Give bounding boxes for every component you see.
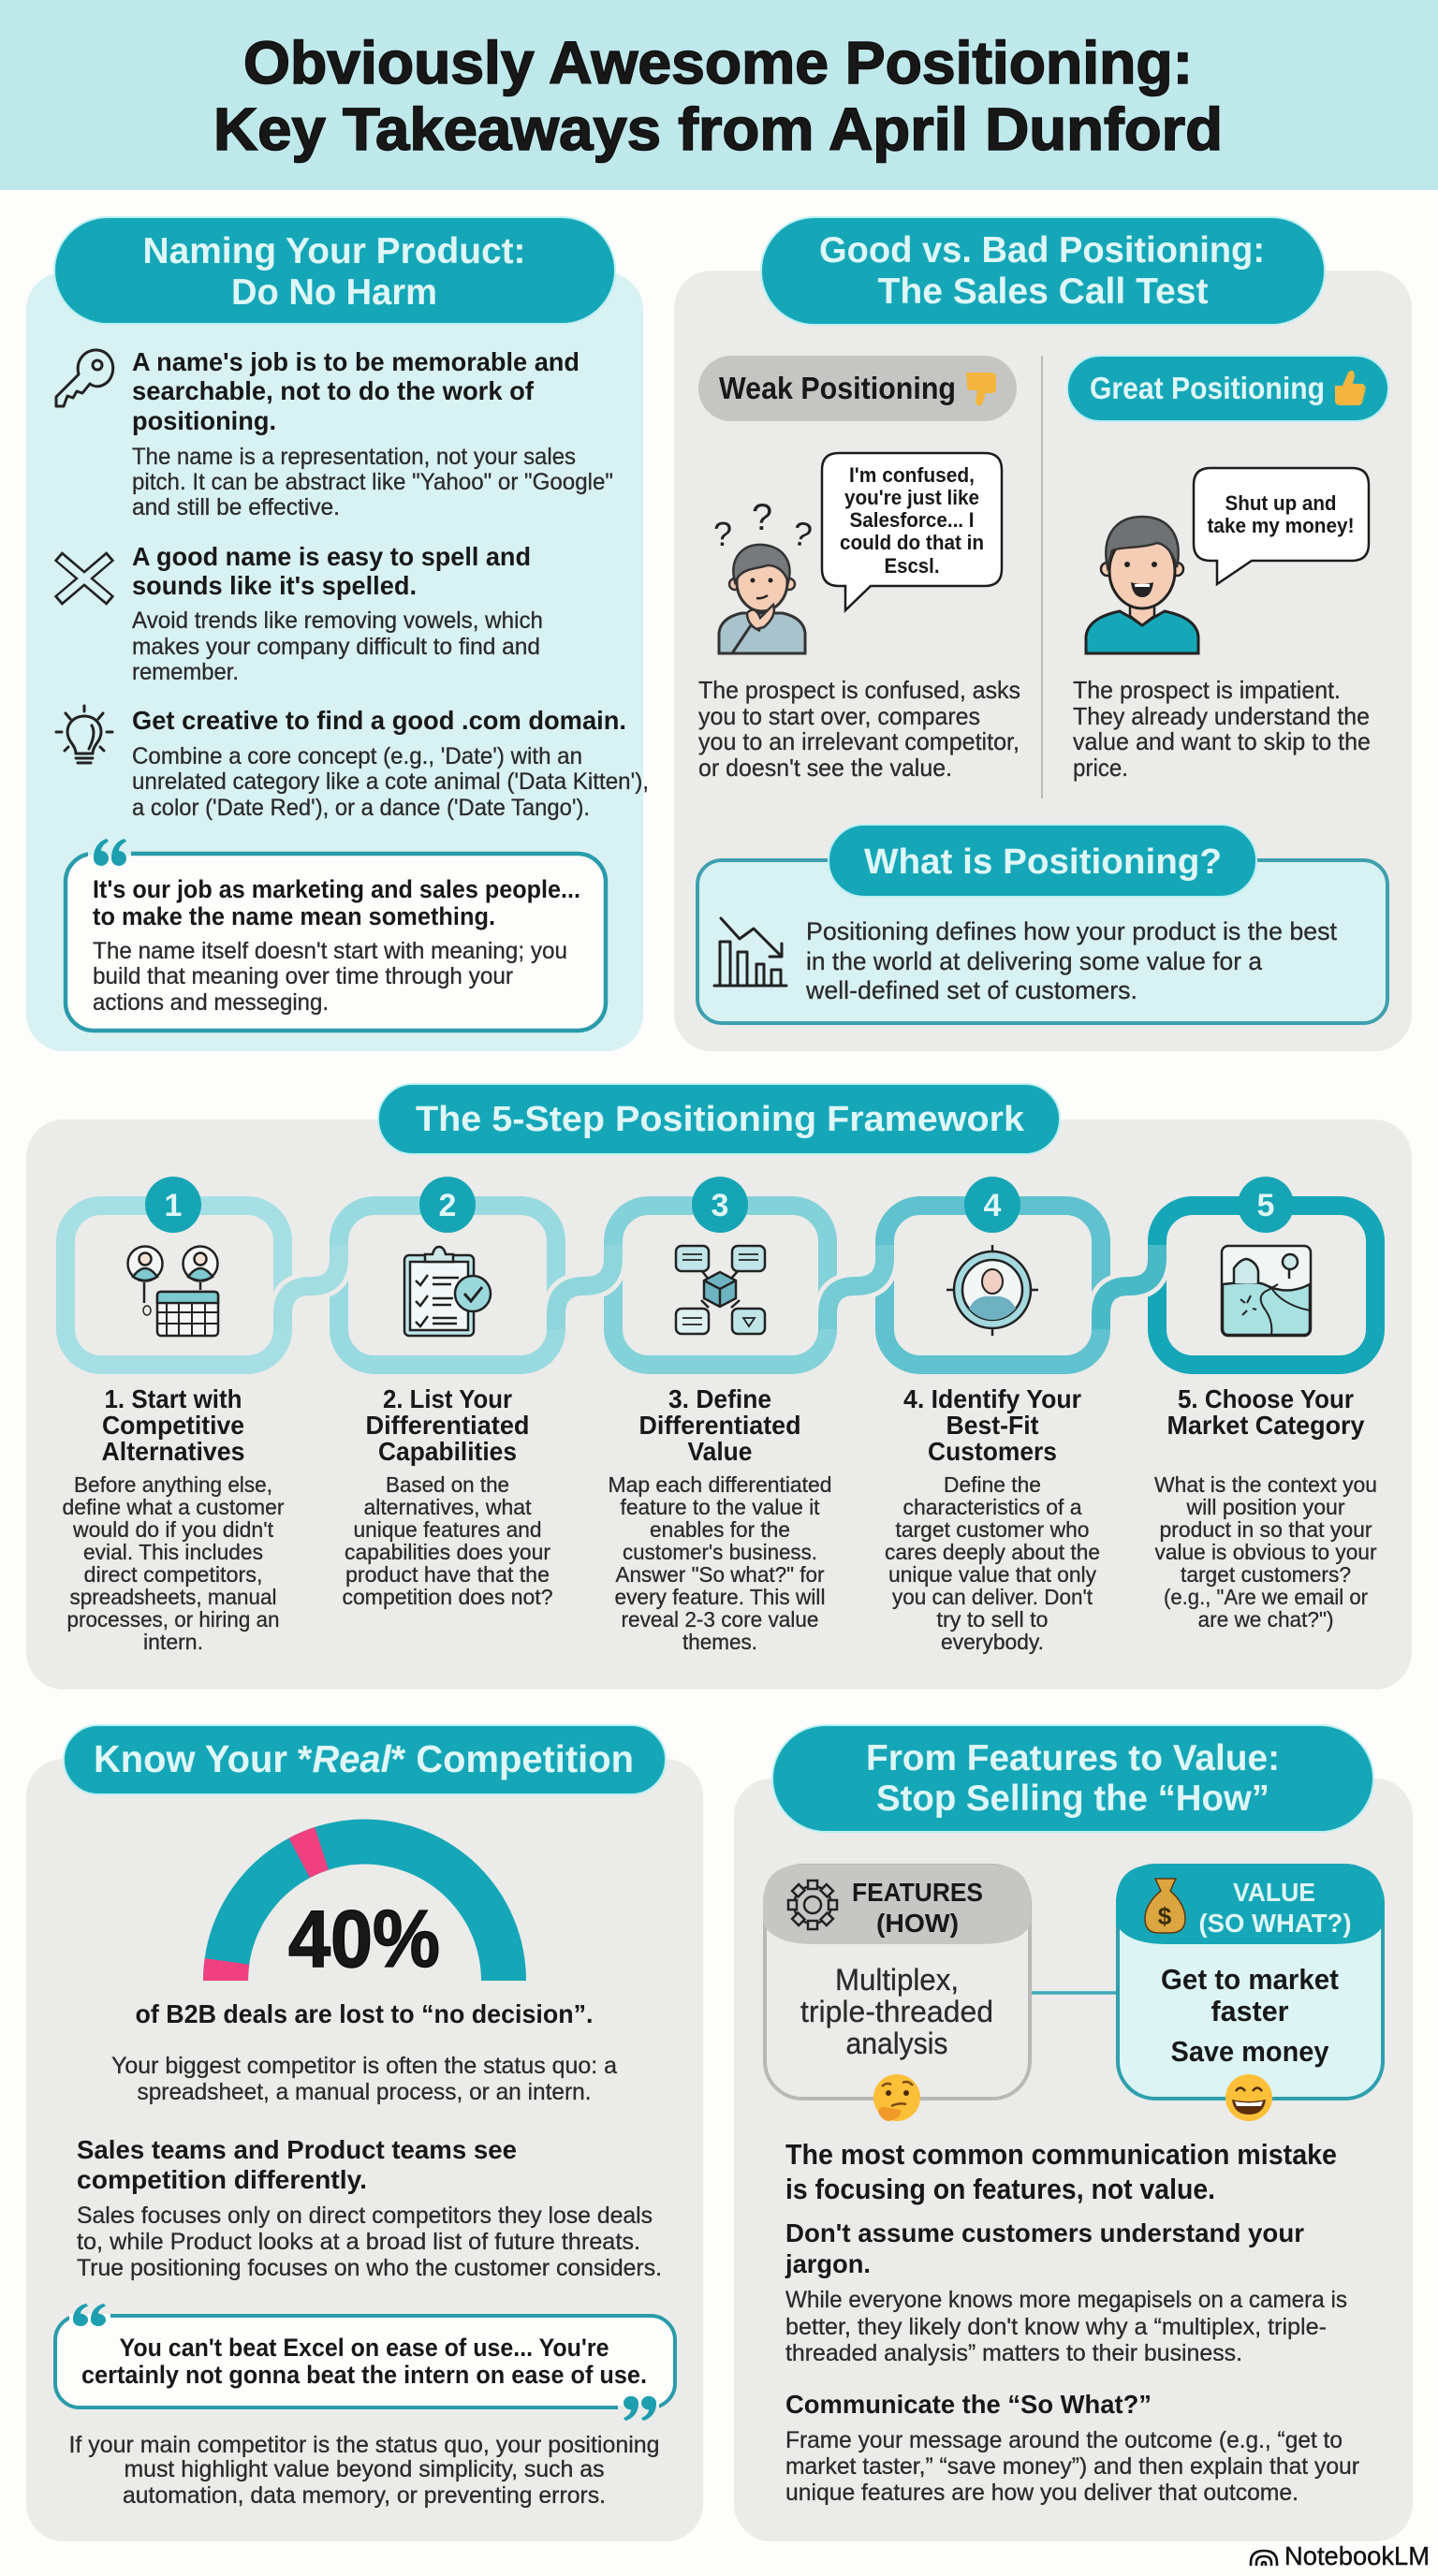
- text: creative domain: Combine a core concept (e.g., 'Date') with an: [132, 743, 582, 769]
- heading pill: naming: [54, 217, 615, 324]
- text: step 3: customer's business.: [623, 1540, 817, 1564]
- heading pill: features to value: From Features to Value:: [866, 1738, 1280, 1778]
- text: name's job: searchable, not to do the work of: [132, 376, 535, 405]
- text: good name: remember.: [132, 659, 239, 685]
- text: name's job: The name is a representation, not your sales: [132, 444, 576, 470]
- callout: make the name mean something: The name itself doesn't start with meaning; you: [93, 938, 567, 964]
- heading pill: real competition: Know Your *Real* Competition: [94, 1737, 634, 1780]
- text: step 4: unique value that only: [888, 1562, 1096, 1587]
- text: common mistake: is focusing on features, not value.: [785, 2173, 1215, 2205]
- text: weak description: The prospect is confused, asks: [698, 676, 1020, 704]
- text: step 2: competition does not?: [343, 1585, 552, 1609]
- icon: thumbs down: [966, 373, 996, 405]
- text: great description: price.: [1073, 754, 1128, 782]
- text: sales vs product teams: [77, 2135, 662, 2281]
- text: step 5: target customers?: [1181, 1562, 1351, 1587]
- text: great description: value and want to skip to the: [1073, 727, 1371, 755]
- text: step 4: try to sell to: [936, 1607, 1049, 1632]
- number badge 1: 1: [165, 1188, 182, 1223]
- callout: make the name mean something: actions and messeging.: [93, 989, 329, 1016]
- icon: happy person: [1086, 517, 1198, 653]
- weak positioning pill: [698, 356, 1017, 421]
- text: sales vs product teams: True positioning focuses on who the customer considers.: [77, 2255, 662, 2281]
- card: value: Save money: [1170, 2035, 1329, 2068]
- text: step 3: feature to the value it: [620, 1495, 820, 1519]
- text: name's job: [132, 347, 613, 520]
- card: features: analysis: [846, 2027, 947, 2060]
- text: sales vs product teams: Sales focuses only on direct competitors they lose deals: [77, 2203, 653, 2229]
- text: step 2: product have that the: [345, 1562, 550, 1587]
- panel: 5-step framework: [26, 1084, 1412, 1690]
- speech bubble: take my money: Shut up and: [1225, 491, 1337, 515]
- card: features: triple-threaded: [800, 1995, 993, 2028]
- step 5: [1154, 1177, 1377, 1632]
- text: name's job: and still be effective.: [132, 494, 340, 520]
- heading pill: sales call test: Good vs. Bad Positioning:: [819, 230, 1265, 271]
- speech bubble: confused: I'm confused,: [849, 463, 975, 487]
- text: great description: [1073, 676, 1371, 782]
- text: step 3: Map each differentiated: [609, 1472, 831, 1497]
- text: step 1: spreadsheets, manual: [69, 1585, 277, 1609]
- box: what is positioning: well-defined set of customers.: [805, 976, 1137, 1004]
- text: good name: makes your company difficult to find and: [132, 634, 540, 660]
- card: value: Get to market: [1161, 1963, 1339, 1996]
- speech bubble: take my money: [1194, 468, 1369, 584]
- panel: features to value: [734, 1725, 1413, 2541]
- icon: gear: [788, 1881, 837, 1929]
- step frames with connectors: [66, 1206, 1375, 1365]
- heading pill: framework: [378, 1084, 1060, 1154]
- heading pill: sales call test: [761, 217, 1325, 325]
- text: step 2: Capabilities: [378, 1437, 517, 1466]
- text: sales vs product teams: Sales teams and Product teams see: [77, 2135, 517, 2164]
- NotebookLM logo: NotebookLM: [1284, 2541, 1430, 2570]
- number badge 2: [419, 1177, 476, 1233]
- text: creative domain: unrelated category like a cote animal ('Data Kitten'),: [132, 768, 649, 795]
- text: no decision: spreadsheet, a manual process, or an intern.: [137, 2079, 592, 2105]
- icon: confused person: ?: [789, 513, 815, 555]
- number badge 4: 4: [984, 1188, 1002, 1223]
- title: Key Takeaways from April Dunford: [213, 95, 1223, 163]
- icon: thinking face: [873, 2074, 920, 2121]
- callout: excel quote: [55, 2304, 675, 2421]
- text: weak description: [698, 676, 1020, 782]
- great positioning pill: [1067, 356, 1388, 421]
- heading pill: what is positioning: [829, 825, 1256, 897]
- panel: good vs bad positioning: [674, 217, 1412, 1051]
- speech bubble: confused: [822, 453, 1002, 610]
- text: step 5: will position your: [1185, 1495, 1345, 1519]
- text: step 4: you can deliver. Don't: [892, 1585, 1093, 1609]
- text: step 3: 3. Define: [668, 1384, 771, 1413]
- text: step 5: (e.g., "Are we email or: [1164, 1585, 1368, 1609]
- icon: light bulb: [56, 706, 112, 763]
- text: no decision: of B2B deals are lost to “no decision”.: [135, 1999, 594, 2028]
- text: jargon: better, they likely don't know why a “multiplex, triple-: [785, 2314, 1327, 2340]
- card: features: [763, 1865, 1031, 2121]
- icon: target customer: [946, 1245, 1038, 1336]
- box: what is positioning: in the world at delivering some value for a: [806, 947, 1263, 975]
- text: step 2: Differentiated: [365, 1411, 530, 1440]
- text: step 1: direct competitors,: [84, 1562, 262, 1587]
- text: jargon: jargon.: [785, 2249, 871, 2278]
- text: step 5: Market Category: [1167, 1411, 1365, 1440]
- text: step 4: 4. Identify Your: [903, 1384, 1081, 1413]
- number badge 2: 2: [439, 1188, 456, 1223]
- text: step 3: Value: [687, 1437, 753, 1466]
- speech bubble: confused: you're just like: [844, 486, 979, 509]
- card: value: VALUE: [1233, 1878, 1315, 1907]
- text: step 2: capabilities does your: [345, 1540, 550, 1564]
- icon: confused person: [713, 497, 815, 653]
- text: step 1: would do if you didn't: [72, 1517, 274, 1542]
- callout: make the name mean something: to make the name mean something.: [93, 902, 495, 930]
- icon: confused person: ?: [713, 515, 732, 553]
- text: no decision: Your biggest competitor is often the status quo: a: [111, 2053, 617, 2079]
- text: no decision: [111, 1999, 617, 2105]
- callout: excel quote: You can't beat Excel on ease of use... You're: [120, 2334, 609, 2362]
- icon: opening quote mark: [94, 839, 126, 866]
- icon: money bag: $: [1158, 1902, 1172, 1930]
- header band with title: [0, 0, 1438, 190]
- icon: confused person: ?: [752, 497, 772, 538]
- text: step 1: Before anything else,: [74, 1472, 272, 1497]
- number badge 5: 5: [1257, 1188, 1274, 1223]
- text: weak description: or doesn't see the value.: [698, 754, 952, 782]
- text: status quo positioning: If your main competitor is the status quo, your positioning: [69, 2432, 659, 2458]
- text: step 4: Define the: [944, 1472, 1041, 1497]
- panel: know your real competition: [26, 1725, 703, 2541]
- card: value: (SO WHAT?): [1198, 1909, 1352, 1938]
- speech bubble: take my money: take my money!: [1208, 514, 1354, 537]
- text: step 2: [343, 1384, 552, 1609]
- icon: grinning face: [1225, 2074, 1272, 2121]
- text: good name: [132, 542, 543, 685]
- icon: clipboard checklist: [404, 1247, 491, 1336]
- icon: closing quote: [624, 2396, 656, 2421]
- text: common mistake: The most common communication mistake: [785, 2138, 1337, 2171]
- text: step 1: processes, or hiring an: [67, 1607, 279, 1632]
- text: step 3: enables for the: [650, 1517, 790, 1542]
- text: weak description: you to start over, compares: [698, 702, 980, 730]
- icon: competitive alternatives: [127, 1247, 218, 1336]
- gauge chart: 40 percent: [203, 1820, 526, 1984]
- text: so what: Frame your message around the outcome (e.g., “get to: [785, 2427, 1343, 2453]
- text: step 3: every feature. This will: [614, 1585, 826, 1609]
- icon: features to value hub: [676, 1246, 765, 1334]
- speech bubble: confused: Salesforce... I: [850, 508, 974, 532]
- heading pill: real competition: [64, 1725, 666, 1794]
- text: creative domain: a color ('Date Red'), or a dance ('Date Tango').: [132, 795, 590, 821]
- step 2: [343, 1177, 552, 1609]
- icon: market map: [1222, 1246, 1311, 1336]
- text: so what: [785, 2390, 1359, 2506]
- text: common mistake: [785, 2138, 1337, 2205]
- text: step 5: 5. Choose Your: [1178, 1384, 1354, 1413]
- text: step 3: reveal 2-3 core value: [622, 1607, 818, 1632]
- heading pill: what is positioning: What is Positioning?: [864, 842, 1222, 882]
- text: jargon: [785, 2218, 1347, 2366]
- text: step 1: intern.: [143, 1630, 203, 1654]
- callout: make the name mean something: [66, 839, 606, 1031]
- gauge chart: 40 percent: 40%: [288, 1895, 440, 1984]
- text: step 1: Alternatives: [101, 1437, 245, 1466]
- callout: make the name mean something: build that meaning over time through your: [93, 963, 513, 989]
- text: jargon: While everyone knows more megapisels on a camera is: [785, 2287, 1347, 2313]
- number badge 3: 3: [712, 1188, 728, 1223]
- text: step 4: target customer who: [895, 1517, 1090, 1542]
- number badge 3: [692, 1177, 748, 1233]
- text: status quo positioning: automation, data memory, or preventing errors.: [123, 2482, 606, 2509]
- card: features: Multiplex,: [835, 1963, 959, 1997]
- text: good name: A good name is easy to spell and: [132, 542, 531, 571]
- text: step 3: themes.: [682, 1630, 757, 1654]
- heading pill: features to value: Stop Selling the “How”: [876, 1778, 1269, 1819]
- text: step 2: 2. List Your: [383, 1384, 512, 1413]
- title: [213, 29, 1223, 163]
- step 1: [62, 1177, 285, 1654]
- text: step 5: [1154, 1384, 1377, 1632]
- heading pill: features to value: [772, 1725, 1373, 1832]
- number badge 5: [1238, 1177, 1294, 1233]
- text: step 2: alternatives, what: [363, 1495, 532, 1519]
- heading pill: framework: The 5-Step Positioning Framework: [416, 1100, 1025, 1139]
- text: step 5: product in so that your: [1159, 1517, 1372, 1542]
- text: step 5: are we chat?"): [1198, 1607, 1333, 1632]
- text: status quo positioning: [69, 2432, 659, 2509]
- text: step 1: 1. Start with: [105, 1384, 242, 1413]
- text: so what: unique features are how you deliver that outcome.: [785, 2480, 1299, 2506]
- text: step 1: evial. This includes: [83, 1540, 263, 1564]
- text: great description: The prospect is impatient.: [1073, 676, 1341, 704]
- text: step 5: value is obvious to your: [1155, 1540, 1377, 1564]
- text: step 4: [885, 1384, 1100, 1654]
- text: good name: sounds like it's spelled.: [132, 571, 417, 600]
- number badge 1: [145, 1177, 201, 1233]
- text: step 1: define what a customer: [62, 1495, 285, 1519]
- icon: declining chart: [714, 918, 786, 986]
- icon: opening quote: [73, 2304, 106, 2326]
- number badge 4: [964, 1177, 1020, 1233]
- box: what is positioning: Positioning defines how your product is the best: [806, 917, 1337, 945]
- text: sales vs product teams: to, while Product looks at a broad list of future threats.: [77, 2229, 640, 2255]
- text: so what: market taster,” “save money”) and then explain that your: [785, 2453, 1359, 2480]
- text: name's job: A name's job is to be memorable and: [132, 347, 580, 376]
- card: features: FEATURES: [852, 1878, 983, 1907]
- text: creative domain: Get creative to find a good .com domain.: [132, 706, 626, 735]
- box: what is positioning: [697, 825, 1387, 1023]
- icon: key: [56, 350, 113, 406]
- heading pill: naming: Naming Your Product:: [142, 231, 526, 271]
- text: step 2: Based on the: [386, 1472, 509, 1497]
- text: jargon: threaded analysis” matters to their business.: [785, 2340, 1242, 2366]
- text: step 4: characteristics of a: [902, 1495, 1082, 1519]
- text: step 4: Best-Fit: [946, 1411, 1039, 1440]
- speech bubble: confused: could do that in: [840, 531, 984, 554]
- callout: excel quote: certainly not gonna beat the intern on ease of use.: [81, 2361, 647, 2389]
- icon: crossed X: [58, 556, 110, 601]
- text: great description: They already understand the: [1073, 702, 1370, 730]
- panel: naming your product: [26, 217, 649, 1051]
- text: step 4: cares deeply about the: [885, 1540, 1100, 1564]
- text: step 4: Customers: [928, 1437, 1057, 1466]
- callout: make the name mean something: It's our job as marketing and sales people...: [93, 875, 580, 903]
- text: sales vs product teams: competition differently.: [77, 2165, 367, 2194]
- text: step 2: unique features and: [354, 1517, 541, 1542]
- great positioning pill: Great Positioning: [1090, 371, 1325, 405]
- text: step 3: Differentiated: [638, 1411, 801, 1440]
- step 4: [885, 1177, 1100, 1654]
- text: name's job: positioning.: [132, 406, 276, 435]
- text: weak description: you to an irrelevant competitor,: [698, 727, 1020, 755]
- text: so what: Communicate the “So What?”: [785, 2390, 1152, 2419]
- speech bubble: confused: Escsl.: [884, 554, 940, 578]
- title: Obviously Awesome Positioning:: [243, 29, 1193, 96]
- text: step 1: Competitive: [102, 1411, 244, 1440]
- text: creative domain: [132, 706, 649, 821]
- card: value: [1116, 1865, 1384, 2121]
- text: good name: Avoid trends like removing vowels, which: [132, 607, 543, 634]
- text: status quo positioning: must highlight value beyond simplicity, such as: [124, 2456, 605, 2482]
- heading pill: sales call test: The Sales Call Test: [878, 271, 1208, 312]
- weak positioning pill: Weak Positioning: [719, 371, 956, 405]
- text: step 4: everybody.: [941, 1630, 1044, 1654]
- text: step 5: What is the context you: [1154, 1472, 1377, 1497]
- card: features: (HOW): [876, 1909, 959, 1938]
- text: jargon: Don't assume customers understand your: [785, 2218, 1304, 2247]
- step 3: [609, 1177, 831, 1654]
- text: step 3: Answer "So what?" for: [616, 1562, 825, 1587]
- icon: money bag: [1145, 1879, 1185, 1933]
- card: value: faster: [1211, 1995, 1288, 2027]
- heading pill: naming: Do No Harm: [231, 272, 437, 313]
- icon: thumbs up: [1335, 371, 1366, 405]
- text: name's job: pitch. It can be abstract like "Yahoo" or "Google": [132, 469, 613, 495]
- text: step 3: [609, 1384, 831, 1654]
- text: step 1: [62, 1384, 285, 1654]
